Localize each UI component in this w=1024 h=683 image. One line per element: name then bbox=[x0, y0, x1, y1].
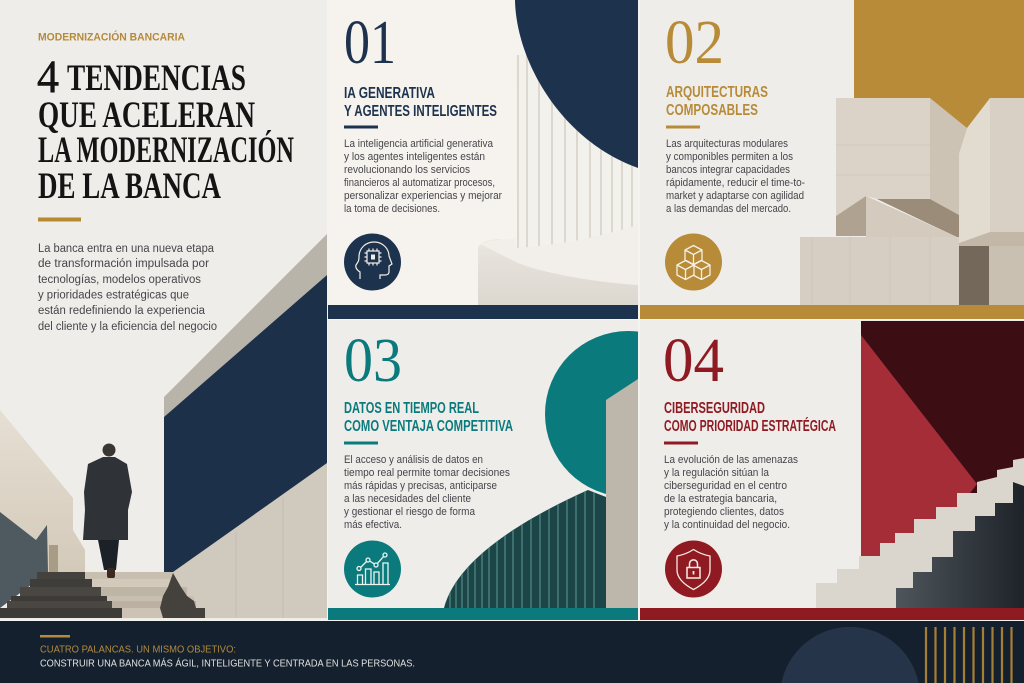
body text: financieros al automatizar procesos, bbox=[344, 177, 495, 189]
heading: COMO VENTAJA COMPETITIVA bbox=[344, 418, 513, 435]
heading bbox=[664, 400, 836, 435]
man in dark coat bbox=[83, 444, 132, 578]
body text: market y adaptarse con agilidad bbox=[666, 190, 804, 202]
footer text bbox=[40, 644, 415, 670]
body text: ciberseguridad en el centro bbox=[664, 480, 787, 492]
title bbox=[37, 51, 294, 207]
body text: revolucionando los servicios bbox=[344, 164, 470, 176]
illustration: teal circle and louvred facade bbox=[444, 331, 638, 608]
body text: personalizar experiencias y mejorar bbox=[344, 190, 502, 202]
heading bbox=[666, 84, 768, 119]
body text bbox=[664, 454, 798, 531]
illustration: red wall and stairs bbox=[816, 321, 1024, 608]
colour bar bbox=[640, 608, 1024, 620]
body text: de la estrategia bancaria, bbox=[664, 493, 777, 505]
body text: La evolución de las amenazas bbox=[664, 454, 798, 466]
number: 04 bbox=[663, 327, 724, 395]
body text: y la regulación sitúan la bbox=[664, 467, 770, 479]
body text bbox=[344, 138, 502, 215]
title: LA MODERNIZACIÓN bbox=[38, 129, 294, 171]
number: 01 bbox=[344, 9, 396, 77]
heading: COMPOSABLES bbox=[666, 102, 758, 119]
panel: trend 04 bbox=[640, 320, 1024, 620]
intro text: del cliente y la eficiencia del negocio bbox=[38, 321, 217, 333]
colour bar bbox=[328, 305, 638, 319]
icon: head with chip bbox=[344, 234, 401, 290]
rule bbox=[666, 126, 700, 128]
illustration: gold block and concrete cubes bbox=[800, 0, 1024, 305]
footer decoration: gold stripes bbox=[926, 627, 1012, 683]
intro text: tecnologías, modelos operativos bbox=[38, 274, 201, 286]
heading: ARQUITECTURAS bbox=[666, 84, 768, 101]
footer band bbox=[0, 621, 1024, 683]
intro text: La banca entra en una nueva etapa bbox=[38, 243, 215, 255]
heading: DATOS EN TIEMPO REAL bbox=[344, 400, 479, 417]
body text: El acceso y análisis de datos en bbox=[344, 454, 483, 466]
icon: chart bbox=[344, 540, 401, 598]
title: 4 bbox=[37, 51, 59, 103]
title: DE LA BANCA bbox=[38, 166, 221, 207]
panel: trend 03 bbox=[328, 331, 638, 620]
heading: Y AGENTES INTELIGENTES bbox=[344, 103, 497, 120]
intro text: y prioridades estratégicas que bbox=[38, 290, 189, 302]
title: QUE ACELERAN bbox=[38, 95, 255, 136]
body text: protegiendo clientes, datos bbox=[664, 506, 784, 518]
heading: CIBERSEGURIDAD bbox=[664, 400, 765, 417]
intro text: están redefiniendo la experiencia bbox=[38, 305, 206, 317]
body text: y la continuidad del negocio. bbox=[664, 519, 790, 531]
rule bbox=[344, 442, 378, 444]
rule bbox=[344, 126, 378, 128]
panel: trend 01 bbox=[328, 0, 638, 319]
number: 02 bbox=[665, 9, 724, 77]
panel: trend 02 bbox=[640, 0, 1024, 319]
body text: y los agentes inteligentes están bbox=[344, 151, 485, 163]
body text: a las necesidades del cliente bbox=[344, 493, 471, 505]
heading bbox=[344, 400, 513, 435]
body text: La inteligencia artificial generativa bbox=[344, 138, 494, 150]
heading: COMO PRIORIDAD ESTRATÉGICA bbox=[664, 418, 836, 435]
heading: IA GENERATIVA bbox=[344, 85, 435, 102]
icon: cubes bbox=[665, 234, 722, 290]
body text: más rápidas y precisas, anticiparse bbox=[344, 480, 497, 492]
title rule bbox=[38, 218, 81, 222]
body text: Las arquitecturas modulares bbox=[666, 138, 788, 150]
colour bar bbox=[328, 608, 638, 620]
eyebrow: MODERNIZACIÓN BANCARIA bbox=[38, 30, 185, 44]
body text bbox=[344, 454, 510, 531]
footer text: CONSTRUIR UNA BANCA MÁS ÁGIL, INTELIGENTE Y CENTRADA EN LAS PERSONAS. bbox=[40, 656, 415, 670]
body text: la toma de decisiones. bbox=[344, 203, 440, 215]
icon: shield with padlock bbox=[665, 540, 722, 598]
illustration: white columns and navy circle bbox=[478, 0, 638, 305]
body text: más efectiva. bbox=[344, 519, 402, 531]
stairs bbox=[0, 572, 205, 618]
footer rule bbox=[40, 635, 70, 638]
rule bbox=[664, 442, 698, 444]
footer text: CUATRO PALANCAS. UN MISMO OBJETIVO: bbox=[40, 644, 236, 656]
body text: bancos integrar capacidades bbox=[666, 164, 790, 176]
panel: introduction bbox=[0, 0, 327, 620]
body text: rápidamente, reducir el time-to- bbox=[666, 177, 805, 189]
heading bbox=[344, 85, 497, 120]
body text: tiempo real permite tomar decisiones bbox=[344, 467, 510, 479]
number: 03 bbox=[344, 327, 402, 395]
intro text bbox=[38, 243, 217, 333]
body text: y gestionar el riesgo de forma bbox=[344, 506, 476, 518]
colour bar bbox=[640, 305, 1024, 319]
body text: y componibles permiten a los bbox=[666, 151, 793, 163]
body text: a las demandas del mercado. bbox=[666, 203, 791, 215]
title: TENDENCIAS bbox=[67, 58, 246, 99]
body text bbox=[666, 138, 805, 215]
intro text: de transformación impulsada por bbox=[38, 258, 209, 270]
footer decoration: circle bbox=[781, 627, 919, 683]
illustration: architecture with man on stairs bbox=[0, 234, 327, 618]
